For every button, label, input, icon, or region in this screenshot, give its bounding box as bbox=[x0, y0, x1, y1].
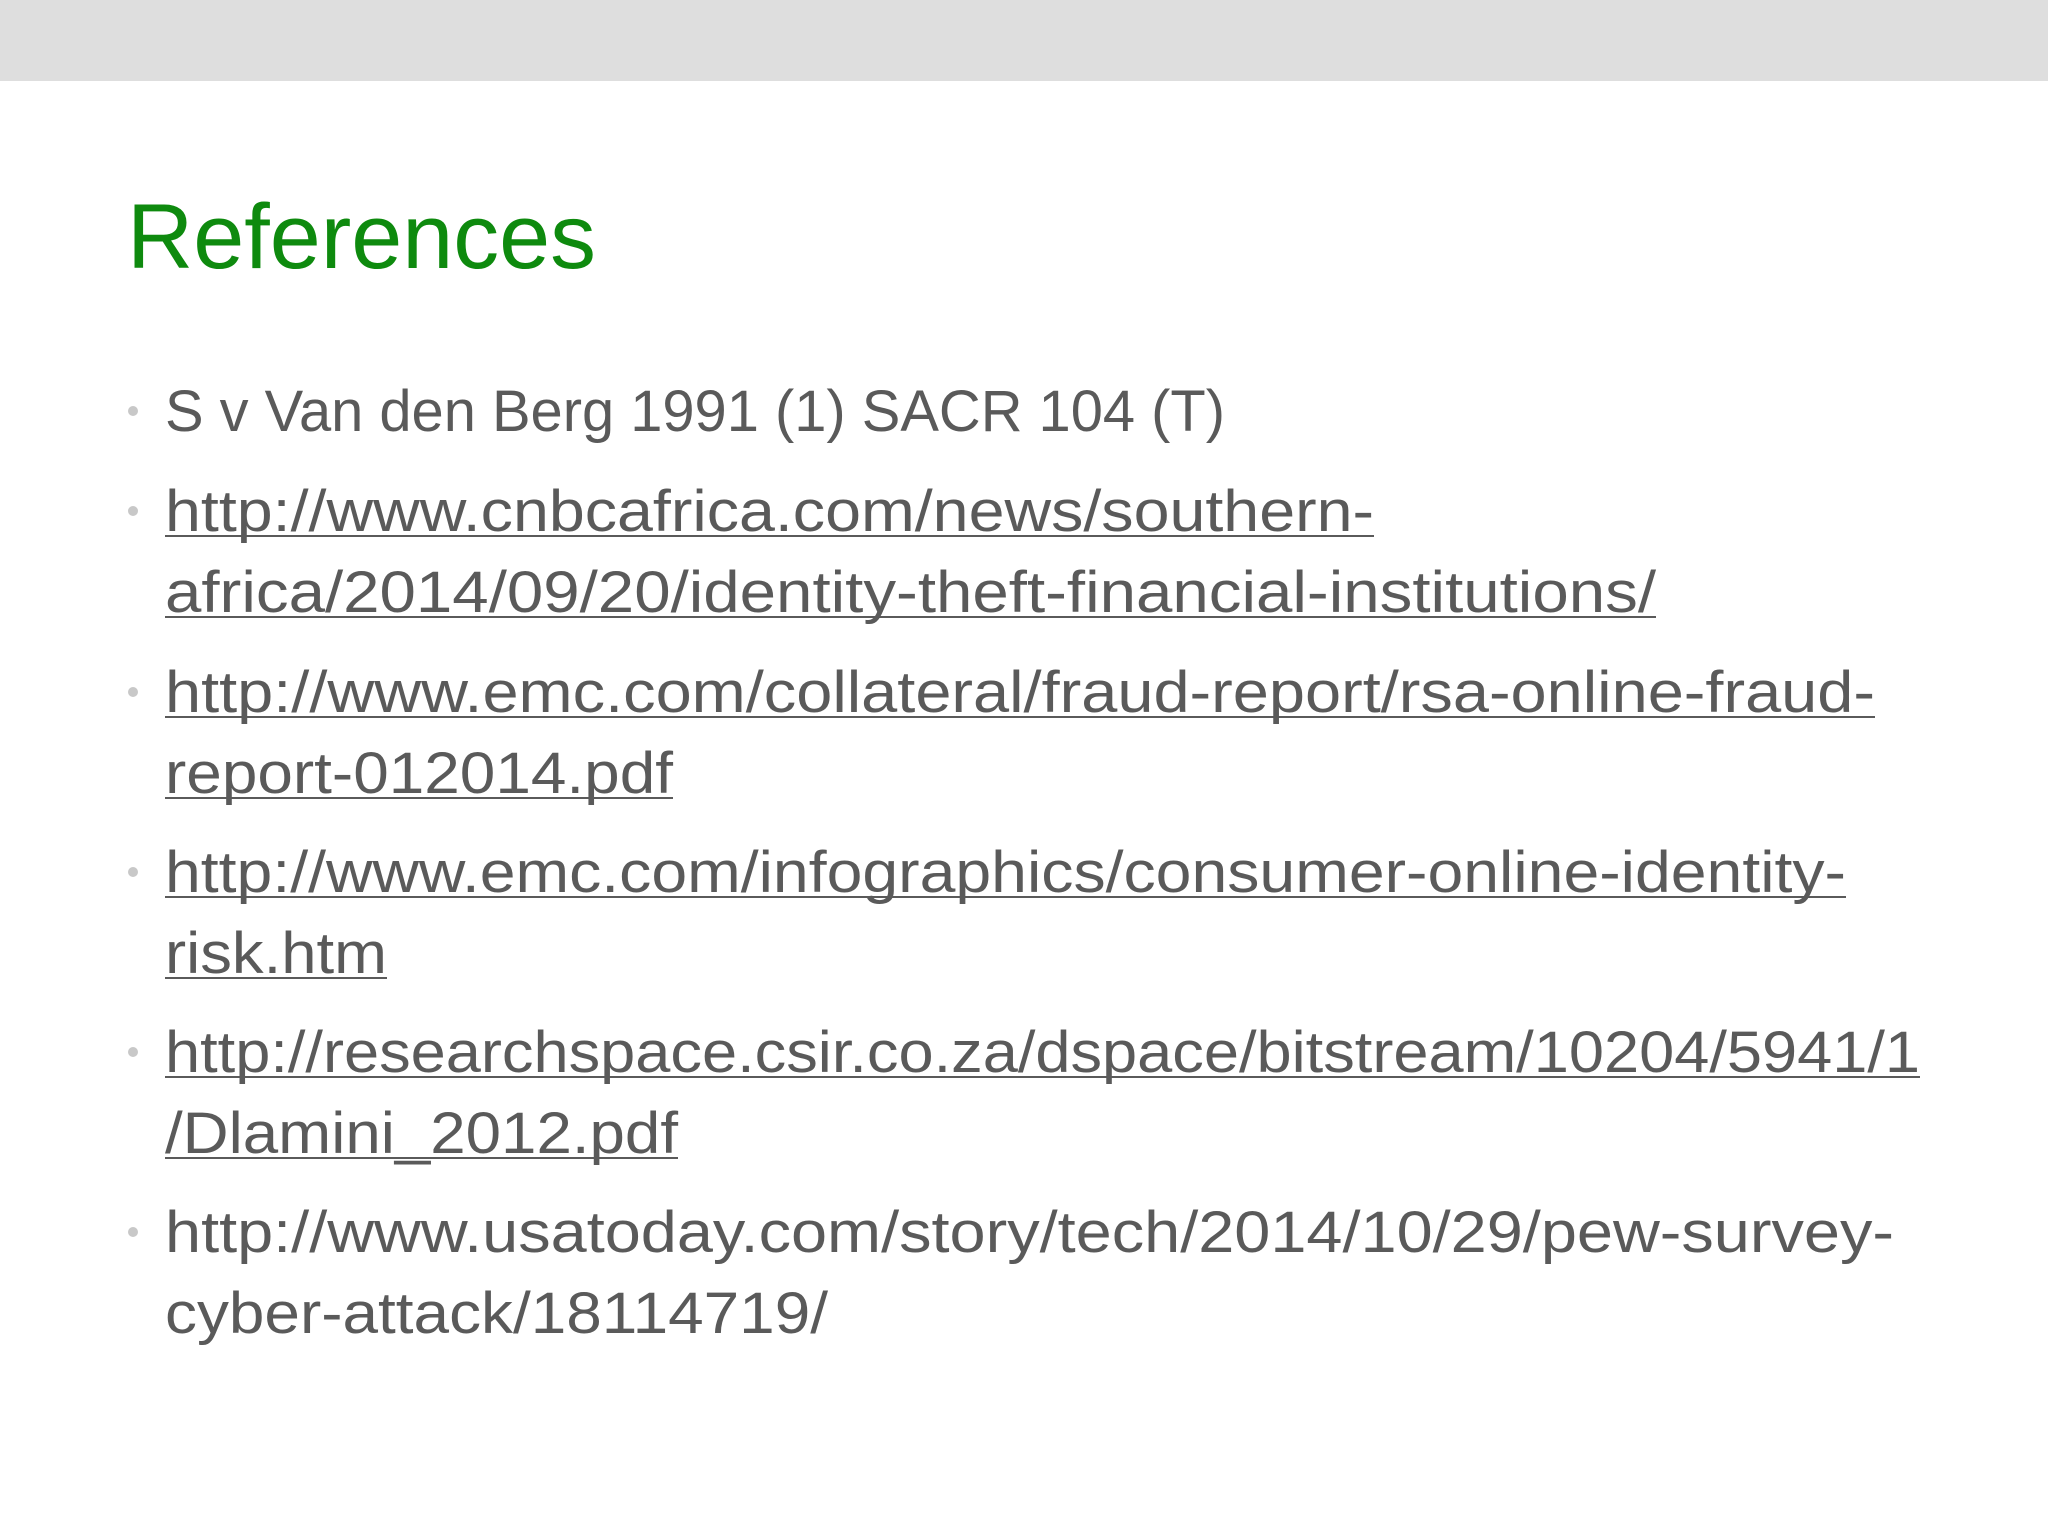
reference list bbox=[128, 379, 1920, 1346]
reference 4 bbox=[128, 840, 1846, 986]
reference 3: report-012014.pdf bbox=[165, 741, 674, 806]
top banner bar bbox=[0, 0, 2048, 81]
reference 4: risk.htm bbox=[165, 921, 387, 986]
reference 2: africa/2014/09/20/identity-theft-financial-institutions/ bbox=[165, 560, 1657, 625]
title: References bbox=[127, 186, 596, 288]
reference 3 bbox=[128, 660, 1875, 806]
reference 6: cyber-attack/18114719/ bbox=[165, 1281, 829, 1346]
reference 6 bbox=[128, 1200, 1894, 1346]
reference 2: http://www.cnbcafrica.com/news/southern- bbox=[165, 479, 1374, 544]
reference 1: S v Van den Berg 1991 (1) SACR 104 (T) bbox=[165, 379, 1225, 444]
reference 5: /Dlamini_2012.pdf bbox=[165, 1101, 679, 1166]
reference 2 bbox=[128, 479, 1657, 625]
reference 6: http://www.usatoday.com/story/tech/2014/10/29/pew-survey- bbox=[165, 1200, 1894, 1265]
reference 5: http://researchspace.csir.co.za/dspace/bitstream/10204/5941/1 bbox=[165, 1020, 1920, 1085]
reference 3: http://www.emc.com/collateral/fraud-report/rsa-online-fraud- bbox=[165, 660, 1875, 725]
reference 5 bbox=[128, 1020, 1920, 1166]
reference 4: http://www.emc.com/infographics/consumer-online-identity- bbox=[165, 840, 1846, 905]
